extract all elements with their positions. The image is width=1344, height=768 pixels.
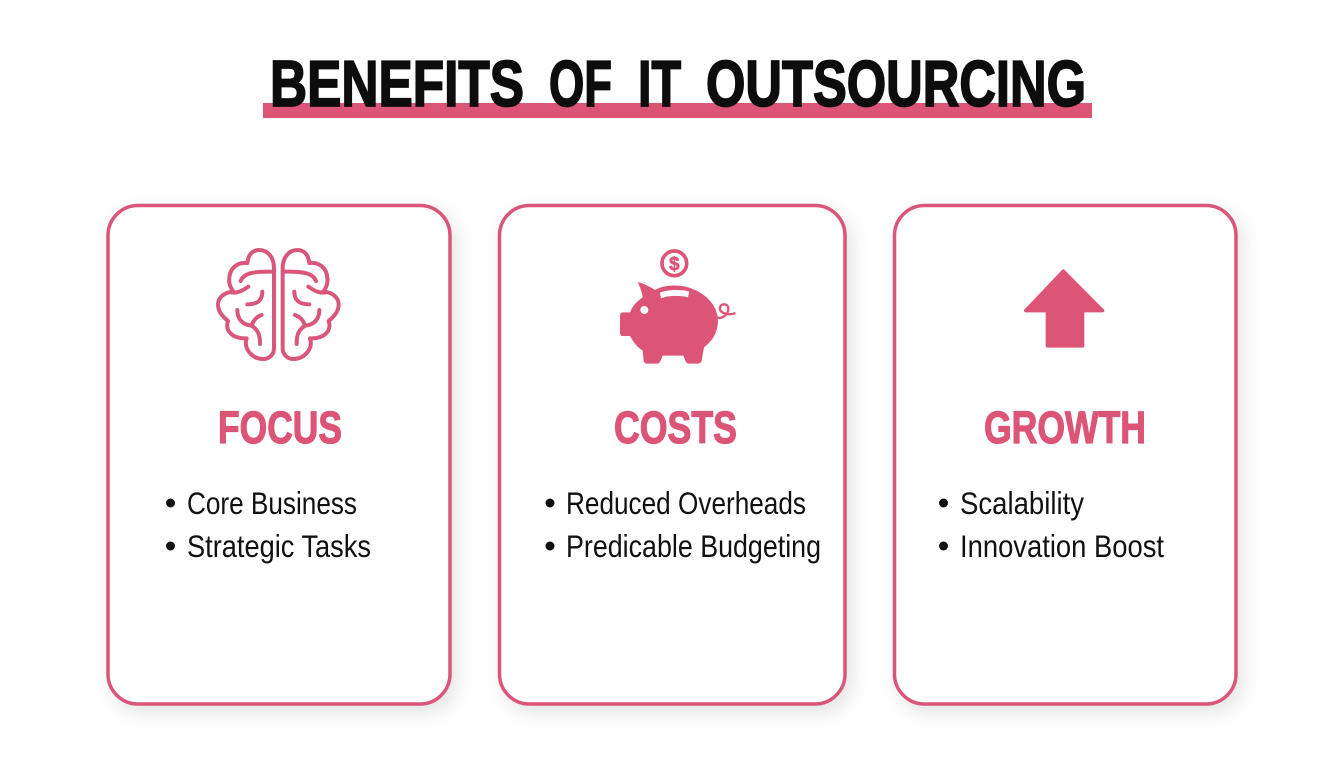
panel: growth — [894, 206, 1236, 704]
panel: focus — [108, 206, 450, 704]
list: growth items — [939, 485, 1164, 564]
icon: piggy bank: $ — [669, 253, 680, 274]
list: focus items: Core Business — [187, 485, 357, 521]
title with underline: BENEFITS — [270, 47, 524, 120]
heading: focus: FOCUS — [218, 402, 342, 453]
list: growth items: Scalability — [960, 485, 1084, 521]
list: costs items — [546, 485, 821, 564]
icon: up arrow — [1026, 271, 1103, 346]
heading: growth: GROWTH — [984, 402, 1146, 453]
panel: costs — [500, 206, 845, 704]
title with underline: OUTSOURCING — [706, 47, 1086, 120]
title with underline — [263, 47, 1092, 120]
list: costs items: Predicable Budgeting — [566, 528, 821, 564]
title with underline: OF — [549, 47, 612, 120]
icon: piggy bank — [620, 251, 735, 364]
list: focus items — [166, 485, 371, 564]
icon: brain — [218, 250, 339, 359]
list: costs items: Reduced Overheads — [566, 485, 806, 521]
heading: costs: COSTS — [614, 402, 737, 453]
list: growth items: Innovation Boost — [960, 528, 1164, 564]
list: focus items: Strategic Tasks — [187, 528, 371, 564]
title with underline: IT — [638, 47, 681, 120]
